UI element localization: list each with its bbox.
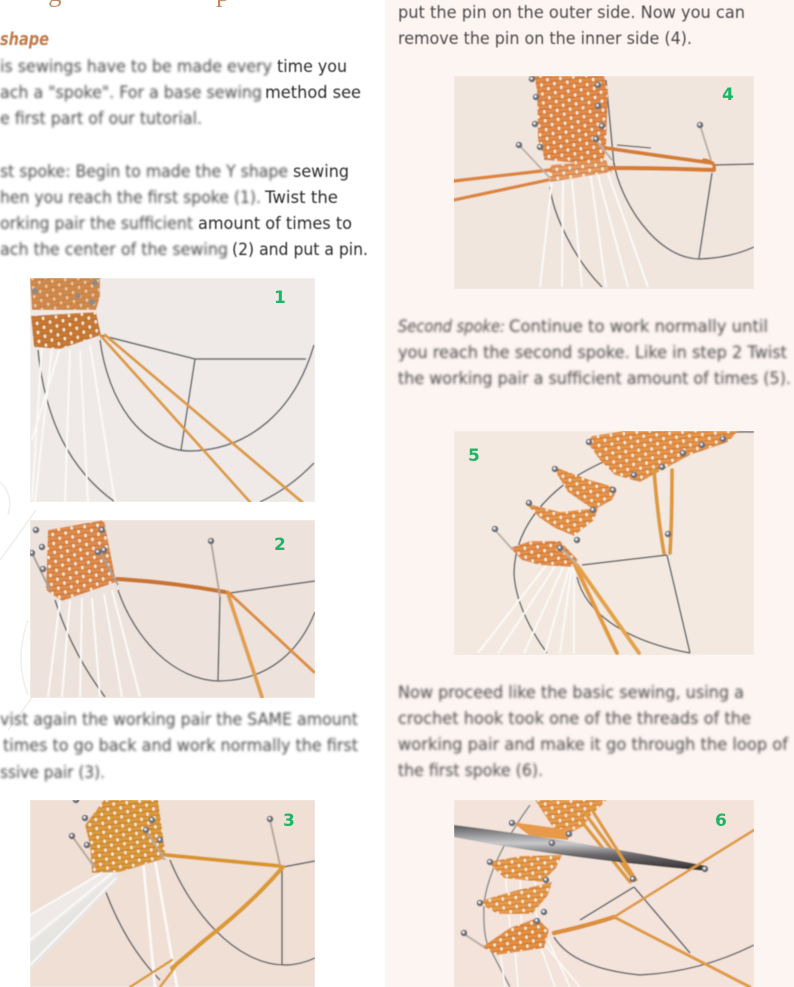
photo 2 bbox=[30, 520, 315, 698]
text block: first spoke: orking pair the sufficient bbox=[0, 214, 193, 233]
text block: second spoke: Second spoke: bbox=[398, 317, 505, 336]
text block: outer side pin: put the pin on the outer side. Now you can bbox=[398, 3, 745, 22]
text block: intro: is sewings have to be made every bbox=[0, 57, 272, 76]
step number 1: 1 bbox=[274, 288, 286, 308]
text block: first spoke: st spoke: Begin to made the Y shape bbox=[0, 162, 288, 181]
text block: proceed like basic sewing bbox=[398, 683, 789, 780]
step number 6: 6 bbox=[715, 811, 727, 831]
text block: proceed like basic sewing: crochet hook took one of the threads of the bbox=[398, 709, 751, 728]
text block: first spoke: hen you reach the first spoke (1). bbox=[0, 188, 261, 207]
text block: first spoke: ach the center of the sewing bbox=[0, 240, 228, 259]
text block: proceed like basic sewing: the first spoke (6). bbox=[398, 761, 543, 780]
text block: outer side pin: remove the pin on the inner side (4). bbox=[398, 29, 692, 48]
photo 6 bbox=[454, 800, 754, 987]
text block: first spoke bbox=[0, 162, 368, 259]
text block: intro bbox=[0, 57, 361, 128]
decorative swirl bbox=[0, 482, 36, 730]
text block: outer side pin bbox=[398, 3, 745, 48]
heading fragment bbox=[48, 0, 230, 7]
photo 3 bbox=[30, 800, 315, 987]
step number 2: 2 bbox=[274, 535, 286, 555]
photo 1 bbox=[30, 278, 315, 502]
text block: twist again: vist again the working pair the SAME amount bbox=[0, 710, 359, 729]
text block: intro: ach a "spoke". For a base sewing bbox=[0, 83, 262, 102]
text block: second spoke bbox=[398, 317, 791, 388]
text block: first spoke: sewing bbox=[293, 162, 349, 181]
text block: intro: method see bbox=[265, 83, 361, 102]
text block: first spoke: Twist the bbox=[264, 188, 338, 207]
step number 3: 3 bbox=[283, 811, 295, 831]
text block: twist again bbox=[0, 710, 359, 782]
text block: first spoke: amount of times to bbox=[198, 214, 352, 233]
text block: first spoke: (2) and put a pin. bbox=[232, 240, 368, 259]
text block: intro: e first part of our tutorial. bbox=[0, 109, 202, 128]
text block: intro: time you bbox=[277, 57, 347, 76]
text block: second spoke: you reach the second spoke. Like in step 2 Twist bbox=[398, 343, 788, 362]
text block: second spoke: the working pair a sufficient amount of times (5). bbox=[398, 369, 791, 388]
section heading: Y shape: shape bbox=[0, 29, 49, 50]
right column panel bbox=[385, 0, 794, 987]
text block: proceed like basic sewing: Now proceed like the basic sewing, using a bbox=[398, 683, 744, 702]
text block: twist again: ssive pair (3). bbox=[0, 763, 105, 782]
text block: proceed like basic sewing: working pair and make it go through the loop of bbox=[398, 735, 789, 754]
step number 4: 4 bbox=[722, 85, 734, 105]
text block: twist again: times to go back and work normally the first bbox=[3, 736, 359, 755]
step number 5: 5 bbox=[468, 446, 480, 466]
photo 5 bbox=[454, 431, 754, 655]
photo 4 bbox=[454, 76, 754, 289]
text block: second spoke: Continue to work normally until bbox=[509, 317, 768, 336]
